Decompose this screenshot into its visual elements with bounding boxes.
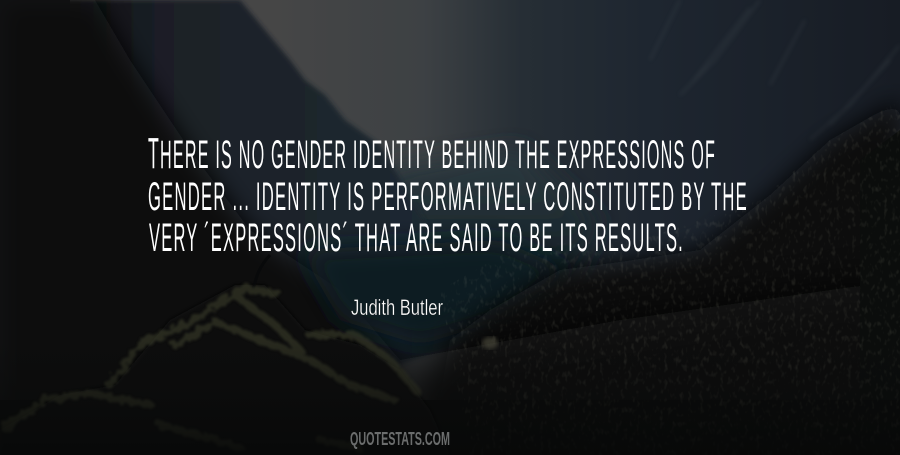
- mossy ridges: [5, 288, 420, 448]
- right forest slope: [441, 100, 900, 367]
- far left dark strip: [0, 0, 70, 400]
- source watermark: QUOTESTATS.COM: [350, 429, 450, 449]
- bottom edge shade: [0, 400, 900, 455]
- forest texture: [441, 110, 900, 420]
- right edge shade: [886, 130, 900, 390]
- bottom fade: [0, 371, 900, 455]
- left blue mountain: [70, 0, 442, 363]
- quote text: [148, 129, 748, 260]
- lower valley: [398, 334, 470, 400]
- valley mist: [394, 159, 584, 264]
- tree on summit: [254, 254, 271, 286]
- clearing: [482, 337, 498, 349]
- foreground hill: [2, 254, 420, 440]
- teal valley floor: [300, 240, 570, 345]
- author name: Judith Butler: [351, 295, 443, 320]
- far left dark mountain: [70, 0, 407, 378]
- snow streaks on right mountain: [700, 60, 888, 74]
